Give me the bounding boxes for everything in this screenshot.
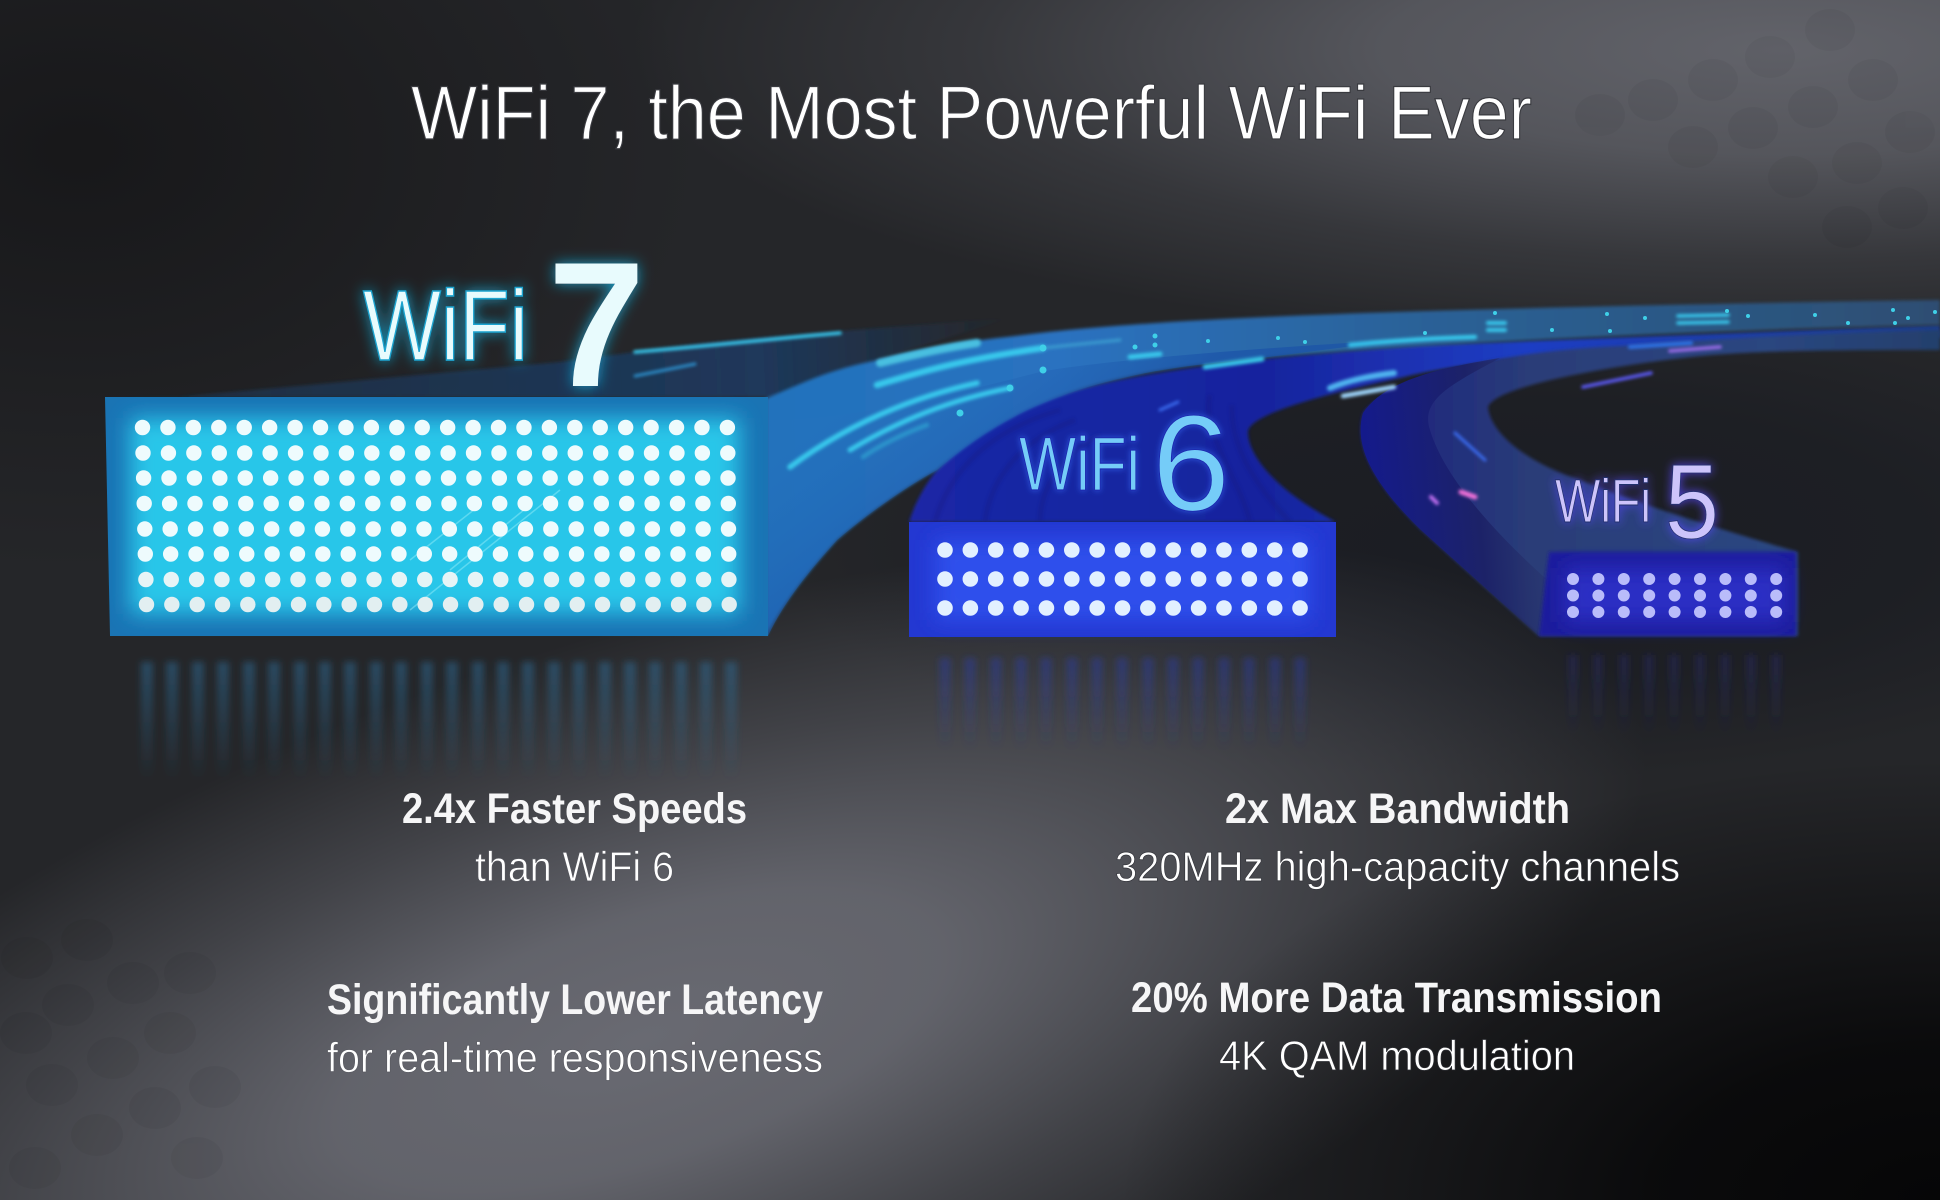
- ribbon: WiFi 7 lower shade: [768, 340, 1400, 636]
- text block: faster speeds: [402, 785, 747, 890]
- WiFi 5 block inner glow: [1565, 568, 1785, 622]
- text block: faster speeds: 2.4x Faster Speeds: [402, 785, 747, 833]
- label: WiFi 7: WiFi: [363, 270, 528, 382]
- WiFi 6 block face: [909, 522, 1336, 637]
- ribbon: WiFi 6: [909, 325, 1940, 522]
- label: WiFi 5: 5: [1665, 443, 1719, 561]
- WiFi 7 block face: [105, 397, 768, 636]
- WiFi 6 dot matrix: [945, 550, 1300, 608]
- reflection: WiFi 5: [1573, 655, 1776, 735]
- WiFi 5 dot matrix: [1573, 579, 1777, 612]
- title: WiFi 7, the Most Powerful WiFi Ever: [411, 71, 1532, 156]
- text block: more data transmission: 4K QAM modulation: [1219, 1032, 1575, 1079]
- label: WiFi 5: [1555, 443, 1719, 561]
- ribbon: WiFi 7: [766, 300, 1940, 636]
- panel: WiFi 6 block: [909, 522, 1336, 637]
- background dot pattern: top right: [1575, 9, 1935, 248]
- ribbon: cyan streaks: [635, 315, 1728, 467]
- WiFi 7 light streaks: [410, 490, 560, 610]
- text block: max bandwidth: [1115, 785, 1680, 890]
- ribbon: WiFi 6 grooves: [935, 395, 1290, 522]
- text block: lower latency: for real-time responsiveness: [327, 1034, 823, 1081]
- text block: lower latency: [327, 976, 823, 1081]
- label: WiFi 7: [363, 225, 645, 424]
- text block: more data transmission: 20% More Data Transmission: [1131, 974, 1662, 1022]
- ribbon: WiFi 7 back surface: [177, 318, 1010, 397]
- background dot pattern: bottom left: [0, 919, 241, 1189]
- ribbon: blue and pink streaks: [1160, 343, 1720, 503]
- text block: max bandwidth: 2x Max Bandwidth: [1225, 785, 1570, 833]
- reflection: WiFi 6: [945, 658, 1300, 750]
- label: WiFi 5: WiFi: [1555, 467, 1651, 535]
- WiFi 7 block inner glow: [130, 418, 740, 614]
- WiFi speed ribbons: [177, 300, 1940, 636]
- panel: WiFi 5 block: [1539, 552, 1796, 636]
- ribbon: WiFi 5: [1361, 330, 1940, 636]
- panel: WiFi 7 block: [105, 397, 768, 636]
- WiFi 7 dot matrix: [142, 428, 730, 604]
- text block: faster speeds: than WiFi 6: [475, 843, 674, 890]
- WiFi 6 block inner glow: [935, 540, 1310, 620]
- label: WiFi 7: 7: [548, 225, 645, 424]
- text block: more data transmission: [1131, 974, 1662, 1079]
- reflection: WiFi 7: [147, 662, 731, 780]
- ribbon: WiFi 5 outer shade: [1361, 358, 1570, 636]
- WiFi 5 block face: [1539, 552, 1796, 636]
- ribbon: data particles: [956, 308, 1937, 416]
- label: WiFi 6: 6: [1152, 387, 1230, 539]
- label: WiFi 6: WiFi: [1019, 422, 1140, 507]
- text block: max bandwidth: 320MHz high-capacity channels: [1115, 843, 1680, 890]
- label: WiFi 6: [1019, 387, 1230, 539]
- text block: lower latency: Significantly Lower Latency: [327, 976, 823, 1024]
